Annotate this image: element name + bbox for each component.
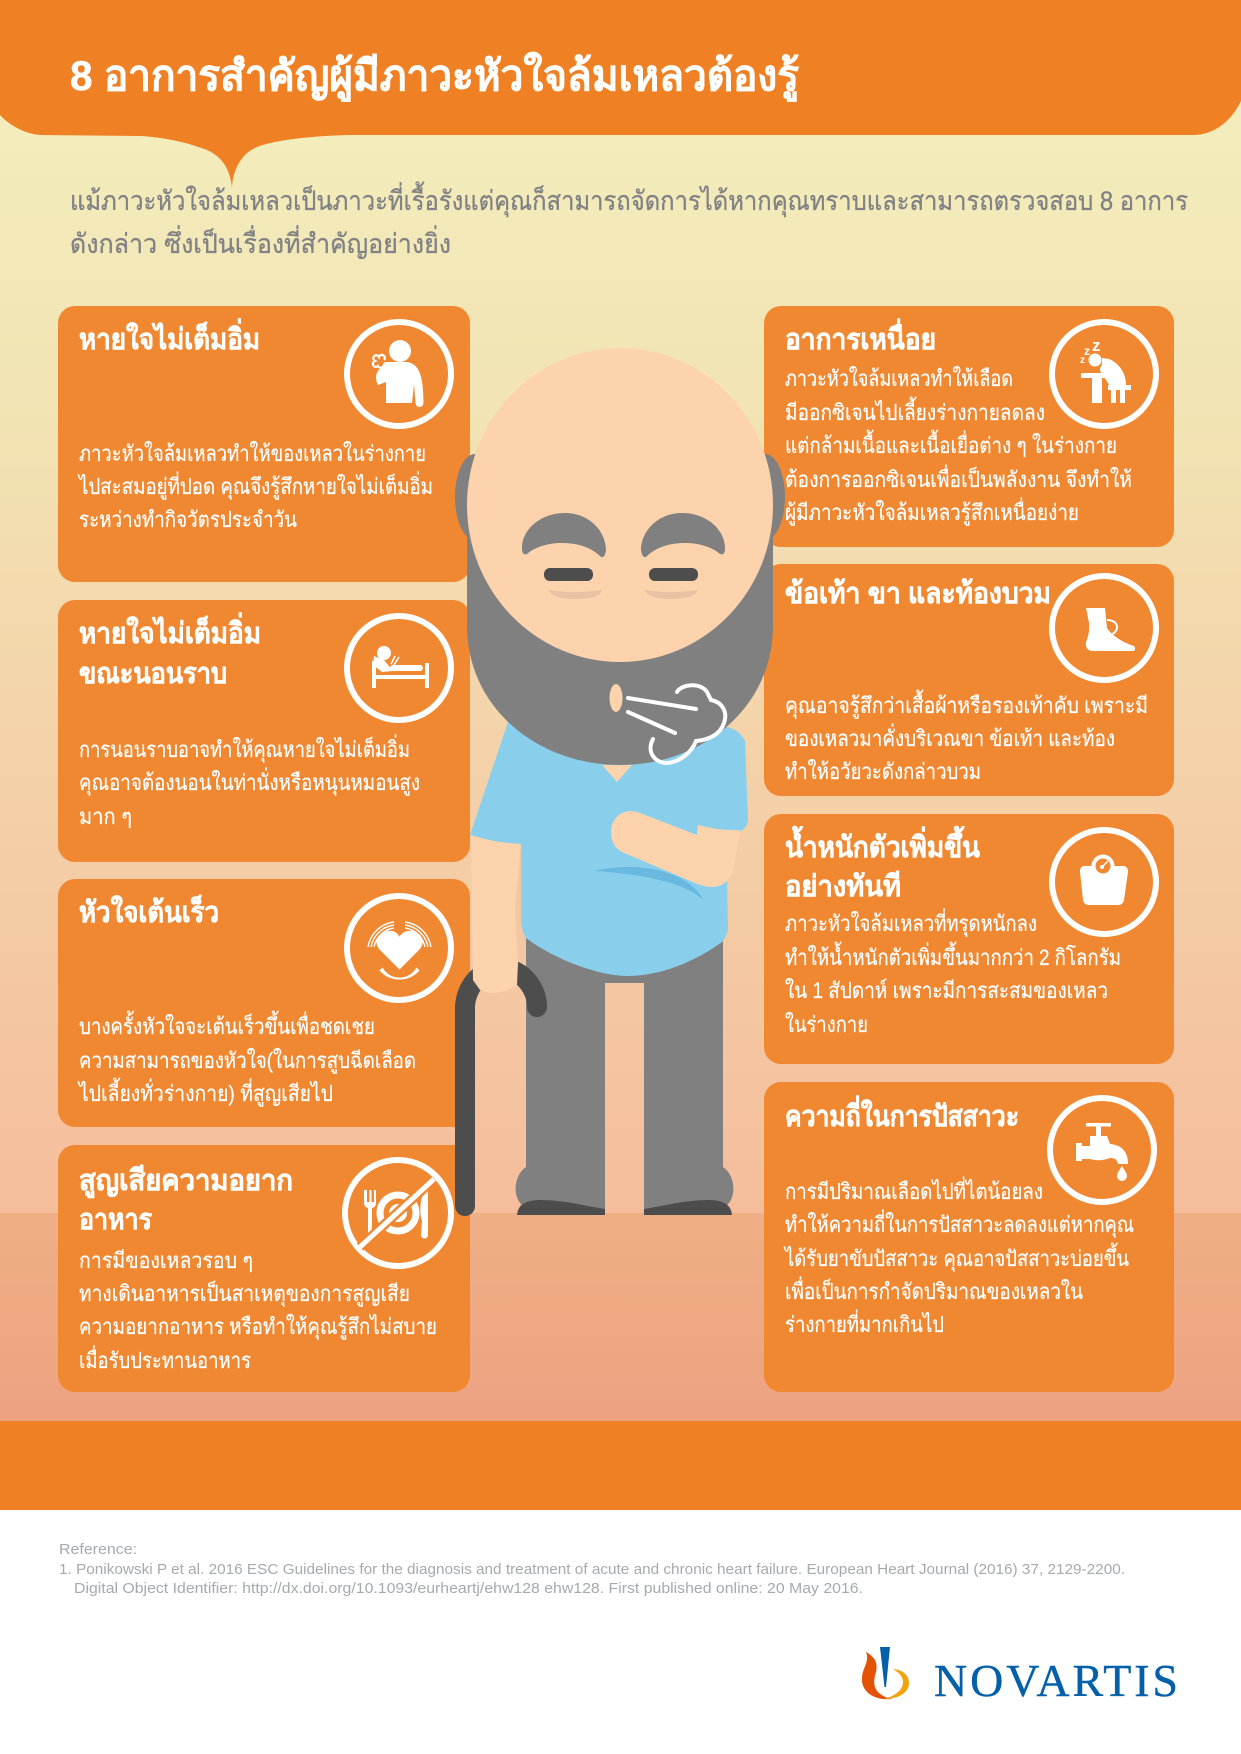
icon: short of breath person <box>347 322 451 426</box>
panel: หายใจไม่เต็มอิ่ม <box>58 306 470 582</box>
ears and hair <box>455 454 785 540</box>
icon: swollen foot <box>1052 576 1156 680</box>
panel: สูญเสียความอยากอาหาร <box>58 1145 470 1392</box>
panel: ข้อเท้า ขา และท้องบวม: คุณอาจรู้สึกว่าเสื้อผ้าหรือรองเท้าคับ เพราะมี <box>785 690 1148 719</box>
intro text <box>70 181 1188 259</box>
under-eye shading <box>548 590 698 599</box>
eyebrows <box>522 513 725 557</box>
panel: น้ำหนักตัวเพิ่มขึ้นอย่างทันที: ทำให้น้ำหนักตัวเพิ่มขึ้นมากกว่า 2 กิโลกรัม <box>785 942 1121 970</box>
panel: ความถี่ในการปัสสาวะ: ร่างกายที่มากเกินไป <box>785 1309 944 1337</box>
panel: ความถี่ในการปัสสาวะ <box>764 1082 1174 1392</box>
title: 8 อาการสำคัญผู้มีภาวะหัวใจล้มเหลวต้องรู้ <box>70 51 799 102</box>
panel: ความถี่ในการปัสสาวะ: การมีปริมาณเลือดไปที่ไตน้อยลง <box>785 1176 1043 1204</box>
panel: สูญเสียความอยากอาหาร: ความอยากอาหาร หรือทำให้คุณรู้สึกไม่สบาย <box>79 1314 437 1340</box>
logo flame <box>862 1647 909 1699</box>
panel: ข้อเท้า ขา และท้องบวม: ทำให้อวัยวะดังกล่าวบวม <box>785 759 981 784</box>
panel: หายใจไม่เต็มอิ่มขณะนอนราบ: หายใจไม่เต็มอิ่ม <box>79 612 261 650</box>
panel: หายใจไม่เต็มอิ่ม: ภาวะหัวใจล้มเหลวทำให้ของเหลวในร่างกาย <box>79 441 426 466</box>
panel: หัวใจเต้นเร็ว: ไปเลี้ยงทั่วร่างกาย) ที่สูญเสียไป <box>77 1078 333 1107</box>
header banner <box>0 0 1241 188</box>
icon: tired person at desk: z <box>1092 336 1100 355</box>
panel: สูญเสียความอยากอาหาร: การมีของเหลวรอบ ๆ <box>79 1248 253 1273</box>
intro text: ดังกล่าว ซึ่งเป็นเรื่องที่สำคัญอย่างยิ่ง <box>70 225 451 259</box>
panel: หายใจไม่เต็มอิ่มขณะนอนราบ: มาก ๆ <box>79 804 132 829</box>
reference text: Digital Object Identifier: http://dx.doi.org/10.1093/eurheartj/ehw128 ehw128. First published online: 20 May 2016. <box>74 1580 863 1597</box>
panel: ข้อเท้า ขา และท้องบวม <box>764 564 1174 796</box>
icon: lying in bed <box>347 616 451 720</box>
background <box>0 0 1241 1213</box>
panel: น้ำหนักตัวเพิ่มขึ้นอย่างทันที: น้ำหนักตัวเพิ่มขึ้น <box>785 825 980 864</box>
face <box>467 348 773 662</box>
reference text: Reference: <box>59 1541 137 1558</box>
panel text: อาการเหนื่อย body: ผู้มีภาวะหัวใจล้มเหลวรู้สึกเหนื่อยง่าย <box>785 497 1079 526</box>
panel: สูญเสียความอยากอาหาร: ทางเดินอาหารเป็นสาเหตุของการสูญเสีย <box>79 1279 410 1307</box>
panel: สูญเสียความอยากอาหาร: อาหาร <box>79 1204 152 1236</box>
bottom orange band <box>0 1421 1241 1510</box>
panel: หัวใจเต้นเร็ว: บางครั้งหัวใจจะเต้นเร็วขึ้นเพื่อชดเชย <box>79 1011 375 1039</box>
panel: สูญเสียความอยากอาหาร: สูญเสียความอยาก <box>79 1165 293 1198</box>
shirt crease <box>594 867 703 900</box>
panel text: อาการเหนื่อย body: แต่กล้ามเนื้อและเนื้อเยื่อต่าง ๆ ในร่างกาย <box>785 430 1117 458</box>
panel: หายใจไม่เต็มอิ่มขณะนอนราบ: คุณอาจต้องนอนในท่านั่งหรือหนุนหมอนสูง <box>79 767 420 796</box>
ground <box>0 1213 1241 1421</box>
icon: beating heart <box>347 896 451 1000</box>
reference text <box>59 1541 1125 1597</box>
left arm shading <box>515 844 526 963</box>
icon: tired person at desk <box>1052 322 1156 426</box>
panel text: อาการเหนื่อย body <box>785 366 1132 526</box>
cane <box>465 968 537 1206</box>
panel: สูญเสียความอยากอาหาร: เมื่อรับประทานอาหาร <box>79 1345 251 1373</box>
icon: no appetite <box>345 1160 451 1266</box>
right arm <box>611 811 740 887</box>
panel: ข้อเท้า ขา และท้องบวม: ข้อเท้า ขา และท้องบวม <box>785 578 1051 610</box>
shoes <box>517 1200 732 1215</box>
eyes <box>544 568 698 581</box>
icon: tired person at desk: z <box>1080 355 1085 366</box>
panel: น้ำหนักตัวเพิ่มขึ้นอย่างทันที: อย่างทันที <box>785 871 901 903</box>
panel: ความถี่ในการปัสสาวะ: ทำให้ความถี่ในการปัสสาวะลดลงแต่หากคุณ <box>785 1209 1134 1238</box>
panel: ความถี่ในการปัสสาวะ: ได้รับยาขับปัสสาวะ คุณอาจปัสสาวะบ่อยขึ้น <box>783 1243 1129 1272</box>
panel: หายใจไม่เต็มอิ่มขณะนอนราบ: ขณะนอนราบ <box>79 658 227 690</box>
panel text: อาการเหนื่อย body: ต้องการออกซิเจนเพื่อเป็นพลังงาน จึงทำให้ <box>785 464 1132 492</box>
panel text: อาการเหนื่อย body: มีออกซิเจนไปเลี้ยงร่างกายลดลง <box>785 397 1045 425</box>
character: old man with cane <box>455 348 785 1215</box>
panel: อาการเหนื่อย <box>764 306 1174 547</box>
panel: อาการเหนื่อย: อาการเหนื่อย <box>785 318 936 356</box>
neck opening <box>602 765 632 782</box>
panel: น้ำหนักตัวเพิ่มขึ้นอย่างทันที: ภาวะหัวใจล้มเหลวที่ทรุดหนักลง <box>785 908 1037 937</box>
panel: หายใจไม่เต็มอิ่มขณะนอนราบ: การนอนราบอาจทำให้คุณหายใจไม่เต็มอิ่ม <box>79 734 410 763</box>
panel: น้ำหนักตัวเพิ่มขึ้นอย่างทันที <box>764 814 1174 1064</box>
reference text: 1. Ponikowski P et al. 2016 ESC Guidelines for the diagnosis and treatment of acute and chronic heart failure. European Heart Journal (2016) 37, 2129-2200. <box>59 1561 1125 1578</box>
panel: หายใจไม่เต็มอิ่มขณะนอนราบ <box>58 600 470 862</box>
trousers <box>516 930 733 1215</box>
icon: weighing scale <box>1052 830 1156 934</box>
footer white area <box>0 1510 1241 1754</box>
left arm <box>471 835 521 993</box>
panel: หัวใจเต้นเร็ว: ความสามารถของหัวใจ(ในการสูบฉีดเลือด <box>79 1048 416 1074</box>
beard <box>467 505 773 765</box>
panel: น้ำหนักตัวเพิ่มขึ้นอย่างทันที: ในร่างกาย <box>785 1012 868 1037</box>
panel: หายใจไม่เต็มอิ่ม: ระหว่างทำกิจวัตรประจำวัน <box>79 507 297 532</box>
icon: water tap <box>1050 1098 1154 1202</box>
panel: หัวใจเต้นเร็ว: หัวใจเต้นเร็ว <box>79 894 219 929</box>
panel: ข้อเท้า ขา และท้องบวม: ของเหลวมาคั่งบริเวณขา ข้อเท้า และท้อง <box>785 723 1115 751</box>
icon: tired person at desk: z <box>1084 344 1090 358</box>
panel: ความถี่ในการปัสสาวะ: ความถี่ในการปัสสาวะ <box>785 1095 1019 1133</box>
breath cloud <box>651 685 725 763</box>
logo: Novartis <box>862 1647 1178 1706</box>
panel: หัวใจเต้นเร็ว <box>58 879 470 1127</box>
logo wordmark: NOVARTIS <box>934 1655 1178 1706</box>
shirt <box>470 700 748 976</box>
panel: ความถี่ในการปัสสาวะ: เพื่อเป็นการกำจัดปริมาณของเหลวใน <box>785 1276 1083 1304</box>
panel: หายใจไม่เต็มอิ่ม: ไปสะสมอยู่ที่ปอด คุณจึงรู้สึกหายใจไม่เต็มอิ่ม <box>77 471 433 500</box>
breath lines <box>628 698 696 733</box>
panel text: อาการเหนื่อย body: ภาวะหัวใจล้มเหลวทำให้เลือด <box>785 366 1013 391</box>
mouth <box>610 684 622 712</box>
panel: หายใจไม่เต็มอิ่ม: หายใจไม่เต็มอิ่ม <box>79 318 260 356</box>
panel: น้ำหนักตัวเพิ่มขึ้นอย่างทันที: ใน 1 สัปดาห์ เพราะมีการสะสมของเหลว <box>785 978 1108 1003</box>
